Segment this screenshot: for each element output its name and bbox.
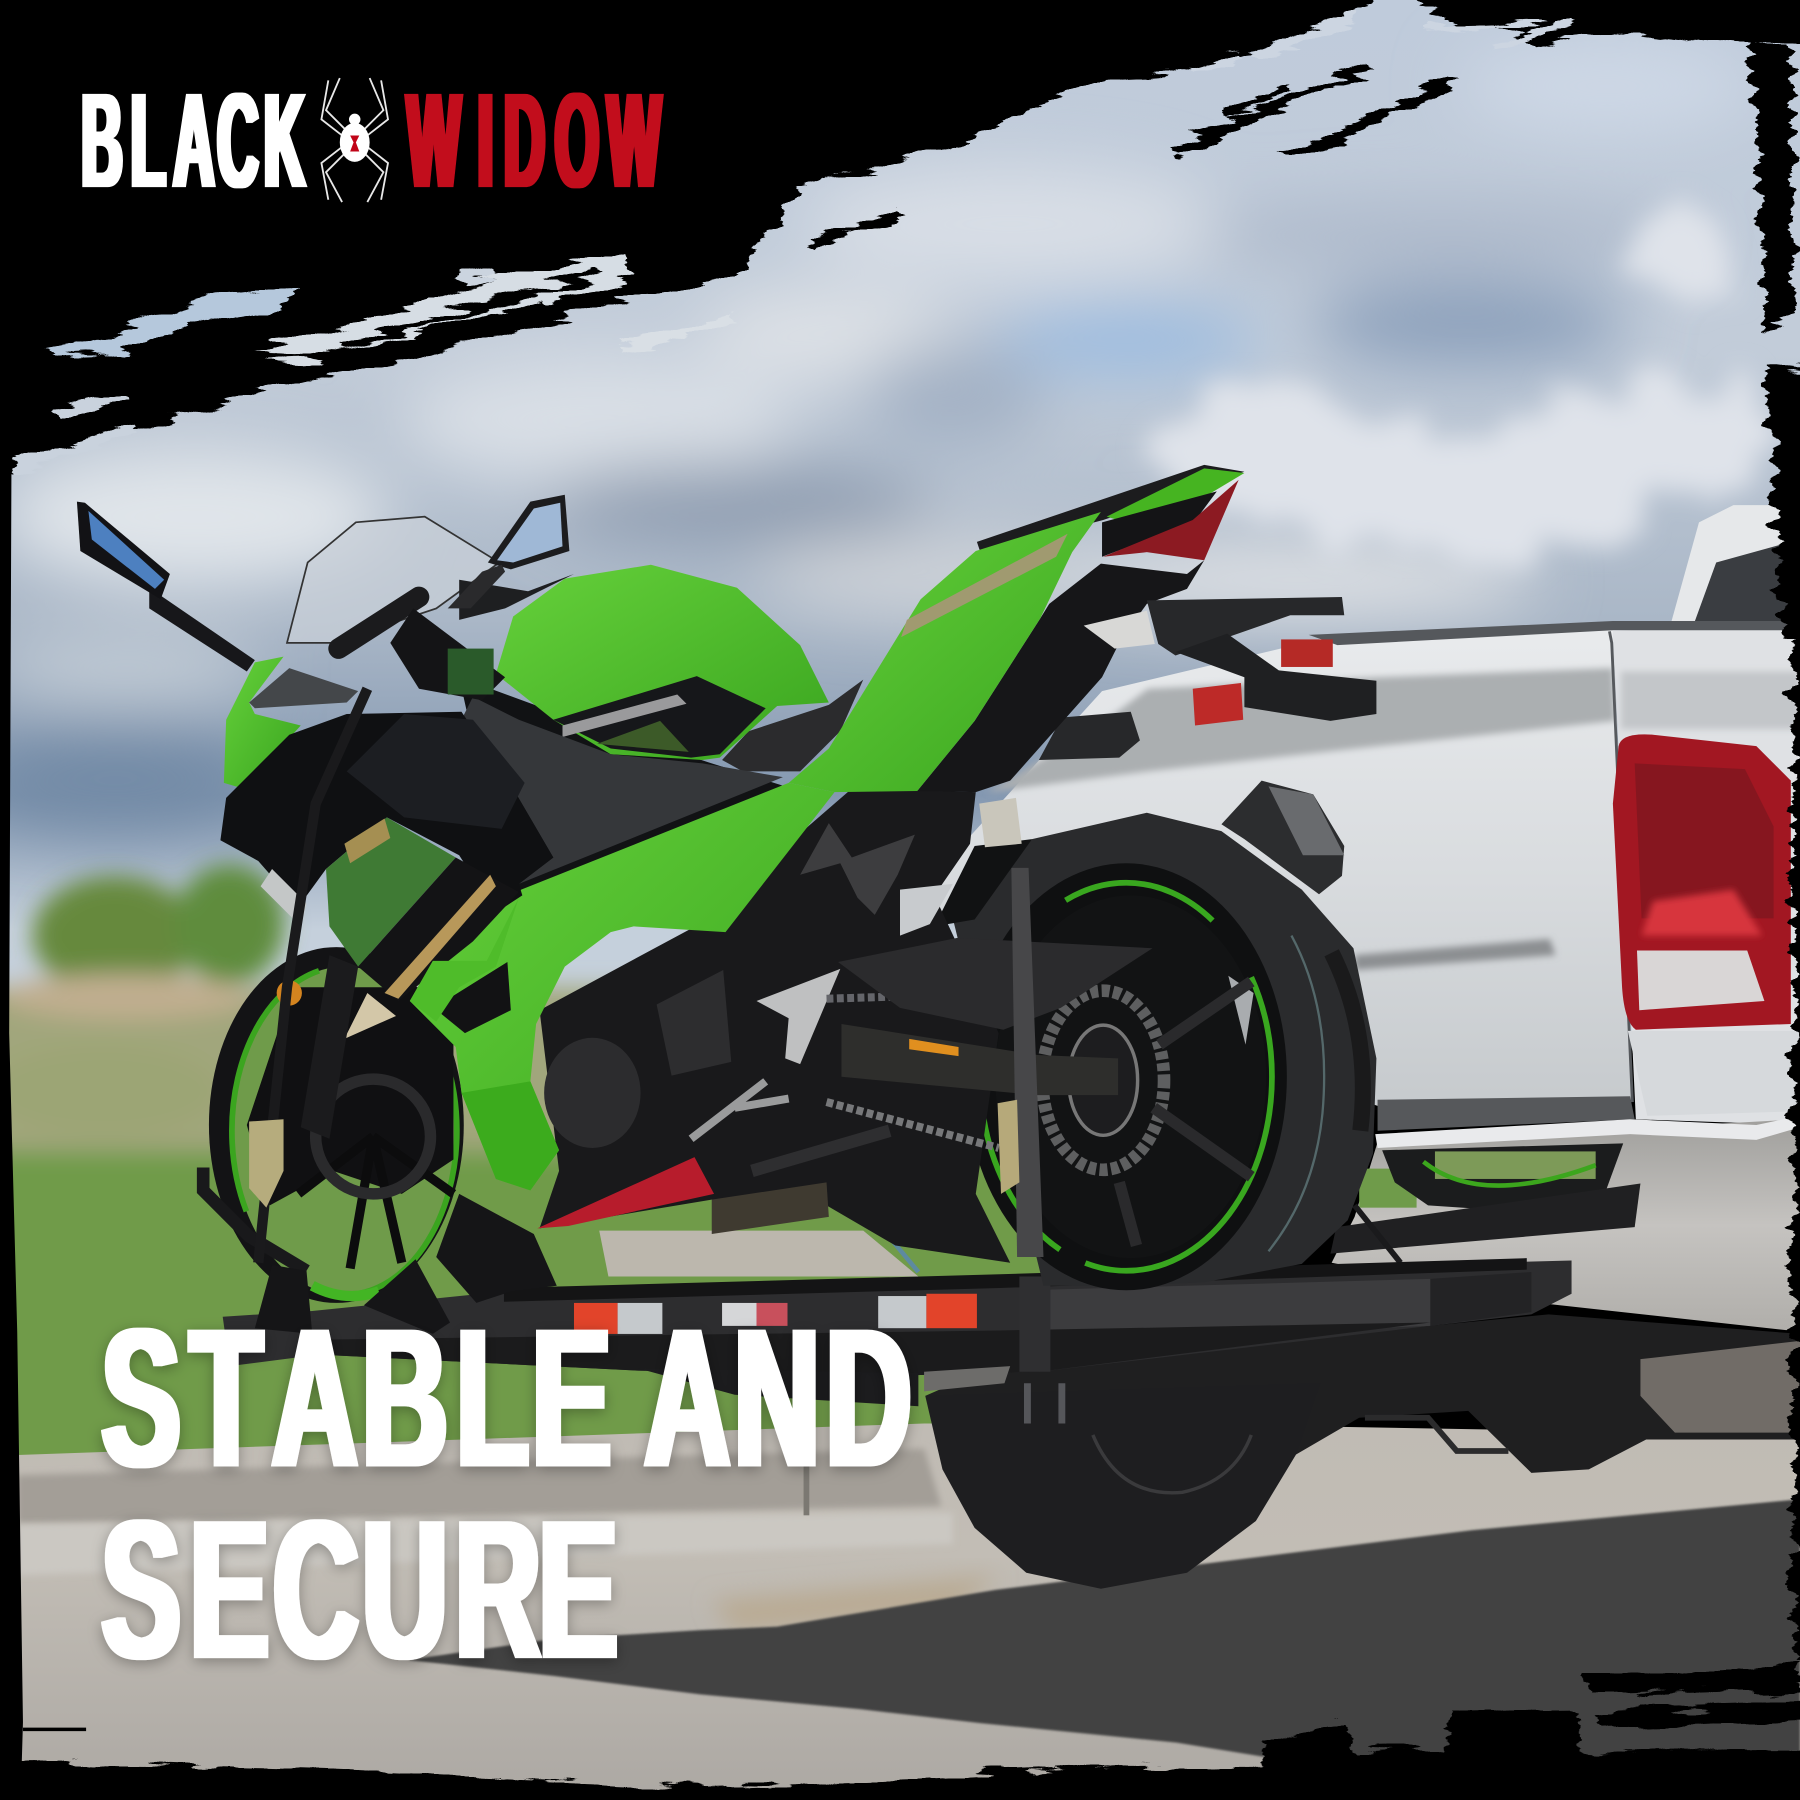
- wheel chock: [203, 1167, 557, 1334]
- green fairing patch: [410, 898, 519, 1022]
- black nose: [220, 712, 553, 913]
- red reflectors: [1281, 639, 1333, 667]
- ground: trees, grass, curb and road: [0, 864, 1800, 1800]
- tailgate: [1613, 630, 1800, 1125]
- rear tie-down strap: [998, 868, 1043, 1257]
- truck underbody: [925, 1314, 1800, 1473]
- sky flakes on black: [14, 11, 1575, 473]
- left edge: [0, 459, 23, 1800]
- right mirror: [448, 495, 569, 608]
- swingarm: [841, 1024, 1118, 1095]
- chrome bumper: [1332, 1119, 1800, 1332]
- side fairing green: [410, 783, 835, 1190]
- rear seat: [977, 465, 1244, 552]
- front wheel: [203, 947, 557, 1334]
- chain: [827, 1102, 999, 1148]
- windscreen: [287, 517, 499, 643]
- black streaks over flakes: [344, 271, 602, 349]
- stripes: [358, 858, 519, 1001]
- rear crossbar: [1330, 1184, 1640, 1254]
- lower tailgate: [1628, 1031, 1800, 1116]
- lower exhaust: [712, 1182, 829, 1234]
- logo: [81, 66, 661, 217]
- left mirror: [77, 502, 255, 672]
- front fork: [301, 955, 358, 1139]
- rear tire: [953, 813, 1376, 1286]
- taillight: [1613, 734, 1791, 1030]
- tank decal: [553, 676, 766, 758]
- reservoir: [979, 798, 1022, 847]
- bottom tear: [0, 1667, 1800, 1800]
- rear wheel: [934, 781, 1376, 1290]
- main beam: [223, 1260, 1572, 1375]
- truck bed: [895, 624, 1632, 1108]
- headline line 2: SECURE: [102, 1479, 618, 1700]
- sprocket: [1042, 991, 1164, 1170]
- dark filler under tank: [459, 677, 804, 907]
- logo word: WIDOW: WIDOW: [407, 66, 661, 217]
- headline line 1: STABLE AND: [102, 1288, 911, 1508]
- tail light: [1102, 491, 1217, 557]
- icon: spider: [321, 78, 388, 202]
- hex decal: [326, 817, 456, 967]
- handlebar: [339, 597, 419, 649]
- tail unit black: [917, 560, 1204, 792]
- red belly pan: [537, 1157, 714, 1228]
- motorcycle carrier rack: [223, 1184, 1640, 1423]
- sky with clouds: [0, 0, 1800, 1033]
- exhaust: [1221, 781, 1344, 894]
- road shadow: [408, 1499, 1800, 1800]
- reflected spare wheel: [1382, 1143, 1623, 1212]
- rear mudguard: [934, 839, 1032, 926]
- mid dark panel: [461, 697, 783, 884]
- motorcycle: [77, 465, 1376, 1263]
- hitch pin: [1019, 1277, 1050, 1372]
- fuel tank: [496, 565, 829, 760]
- left reflector: [574, 1303, 662, 1334]
- spokes: [1119, 982, 1251, 1246]
- front tie-down strap: [258, 689, 367, 1263]
- right reflector: [878, 1294, 977, 1328]
- pickup truck: [895, 505, 1800, 1589]
- tail green panel: [789, 512, 1101, 792]
- truck tire: [925, 1383, 1320, 1589]
- chain guard: [838, 938, 1153, 1030]
- logo word: BLACK: BLACK: [81, 66, 305, 217]
- headline: [102, 1288, 911, 1700]
- footrest hanger: [800, 823, 915, 915]
- small beam logo: [722, 1303, 788, 1326]
- nose fairing green: [224, 657, 301, 789]
- headlight: [261, 869, 307, 926]
- truck cab: [1670, 505, 1800, 643]
- engine and frame: [540, 789, 1010, 1263]
- corner frame line: [23, 1728, 86, 1731]
- rear rim: [965, 863, 1287, 1290]
- silver bracket: [757, 969, 840, 1064]
- stripe and handle: [987, 668, 1615, 792]
- license bracket: [1147, 597, 1344, 655]
